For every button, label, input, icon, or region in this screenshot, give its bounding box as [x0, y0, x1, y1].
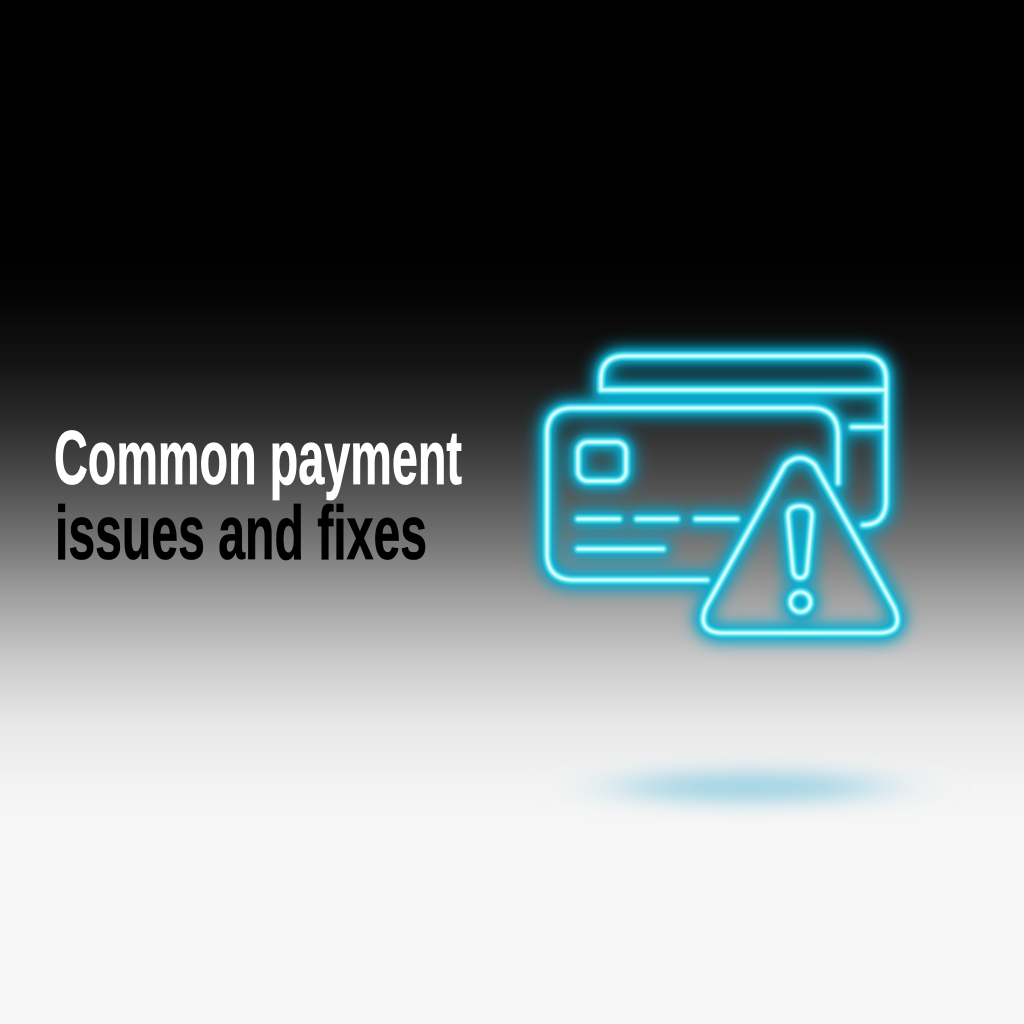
title line 1: Common payment	[54, 416, 462, 501]
title	[54, 416, 462, 576]
floor glow reflection	[615, 772, 885, 802]
title line 2: issues and fixes	[55, 491, 427, 576]
icon: neon credit cards with warning triangle	[547, 356, 897, 633]
